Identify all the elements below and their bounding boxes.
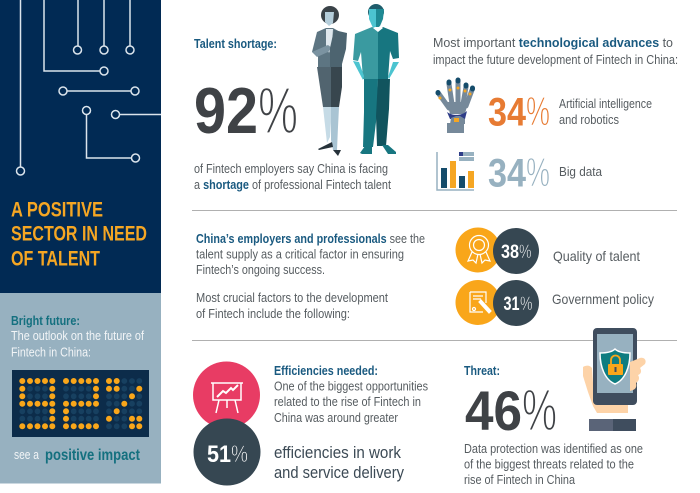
stat: 34% AI: % [526, 88, 550, 134]
stat: 34% big data: 34 [488, 152, 527, 196]
threat text [464, 441, 643, 487]
efficiencies text: China was around greater [274, 410, 399, 425]
efficiencies text [274, 363, 428, 482]
sidebar heading: OF TALENT [11, 248, 100, 270]
panel: bright future [0, 293, 161, 484]
sidebar heading: SECTOR IN NEED [11, 222, 147, 246]
threat text: of the biggest threats related to the [464, 456, 634, 472]
label: big data: Big data [559, 165, 602, 179]
talent shortage text [194, 161, 391, 192]
stat: 34% AI [488, 88, 550, 134]
bright future text: Bright future: [11, 313, 80, 328]
efficiencies text: related to the rise of Fintech in [274, 394, 421, 409]
stat: quality of talent 38%: % [519, 241, 532, 263]
label: AI and robotics [559, 97, 652, 127]
stat: 46%: 46 [465, 379, 522, 442]
stat: 51% [194, 418, 260, 486]
stat: government policy 31% [456, 280, 539, 326]
threat heading: Threat: [464, 363, 500, 378]
text: employers and professionals: of Fintech include the following: [196, 306, 350, 321]
text: employers and professionals: talent supply as a critical factor in ensuring [196, 246, 404, 262]
stat: 92%: 92 [194, 74, 258, 147]
label: AI and robotics: Artificial intelligence [559, 97, 652, 111]
icon: hand holding phone with lock [583, 328, 646, 431]
technological advances heading: Most important technological advances to [433, 35, 673, 50]
icon: presentation chart on pink circle [193, 362, 260, 428]
figure: businessman [353, 4, 399, 154]
efficiencies text: Efficiencies needed: [274, 363, 378, 378]
icon: robot hand [438, 80, 472, 133]
threat text: Data protection was identified as one [464, 441, 643, 456]
text: employers and professionals: Fintech’s ongoing success. [196, 262, 325, 277]
stat: quality of talent 38%: 38 [501, 241, 519, 263]
label: AI and robotics: and robotics [559, 113, 619, 127]
text: employers and professionals: Most crucial factors to the development [196, 290, 388, 305]
talent shortage heading: Talent shortage: [194, 36, 277, 51]
label: government policy: Government policy [552, 291, 654, 307]
stat: 92%: % [258, 73, 298, 147]
label: quality of talent: Quality of talent [553, 248, 640, 264]
positive impact text: see a [14, 447, 40, 462]
bright future text: Fintech in China: [11, 344, 91, 360]
stat: government policy 31%: % [520, 293, 532, 315]
icon: signed document [470, 292, 491, 313]
sidebar heading: A POSITIVE [11, 198, 103, 222]
positive impact text: positive impact [45, 447, 140, 464]
stat: 46%: % [522, 378, 557, 443]
circuit graphic [16, 0, 161, 175]
icon: bar chart [437, 152, 474, 190]
stat: government policy 31%: 31 [504, 293, 520, 315]
stat: 51%: % [231, 441, 248, 468]
stat: 34% big data [488, 150, 550, 196]
figure: businesswoman [312, 6, 347, 156]
bright future text: The outlook on the future of [11, 328, 144, 343]
shirt cuff [589, 419, 636, 431]
dot matrix display: 92% [12, 370, 149, 437]
sidebar heading [11, 198, 147, 270]
efficiencies text: One of the biggest opportunities [274, 378, 428, 394]
stat: 34% AI: 34 [488, 90, 527, 134]
text: employers and professionals: China’s employers and professionals see the [196, 231, 425, 246]
stat: 92% [194, 73, 298, 147]
talent shortage text: of Fintech employers say China is facing [194, 161, 388, 176]
icon: award rosette [468, 236, 490, 263]
panel: navy sidebar [0, 0, 161, 293]
technological advances heading [433, 35, 678, 67]
bright future text [11, 313, 144, 360]
stat: 51%: 51 [207, 441, 231, 468]
stat: 34% big data: % [526, 150, 550, 196]
talent shortage text: a shortage of professional Fintech talent [194, 177, 391, 192]
positive impact text [14, 447, 140, 464]
efficiencies text: efficiencies in work [274, 443, 401, 462]
stat: 46% [465, 378, 557, 443]
threat text: rise of Fintech in China [464, 472, 576, 487]
efficiencies text: and service delivery [274, 463, 404, 482]
text: employers and professionals [196, 231, 425, 321]
stat: quality of talent 38% [456, 228, 539, 274]
